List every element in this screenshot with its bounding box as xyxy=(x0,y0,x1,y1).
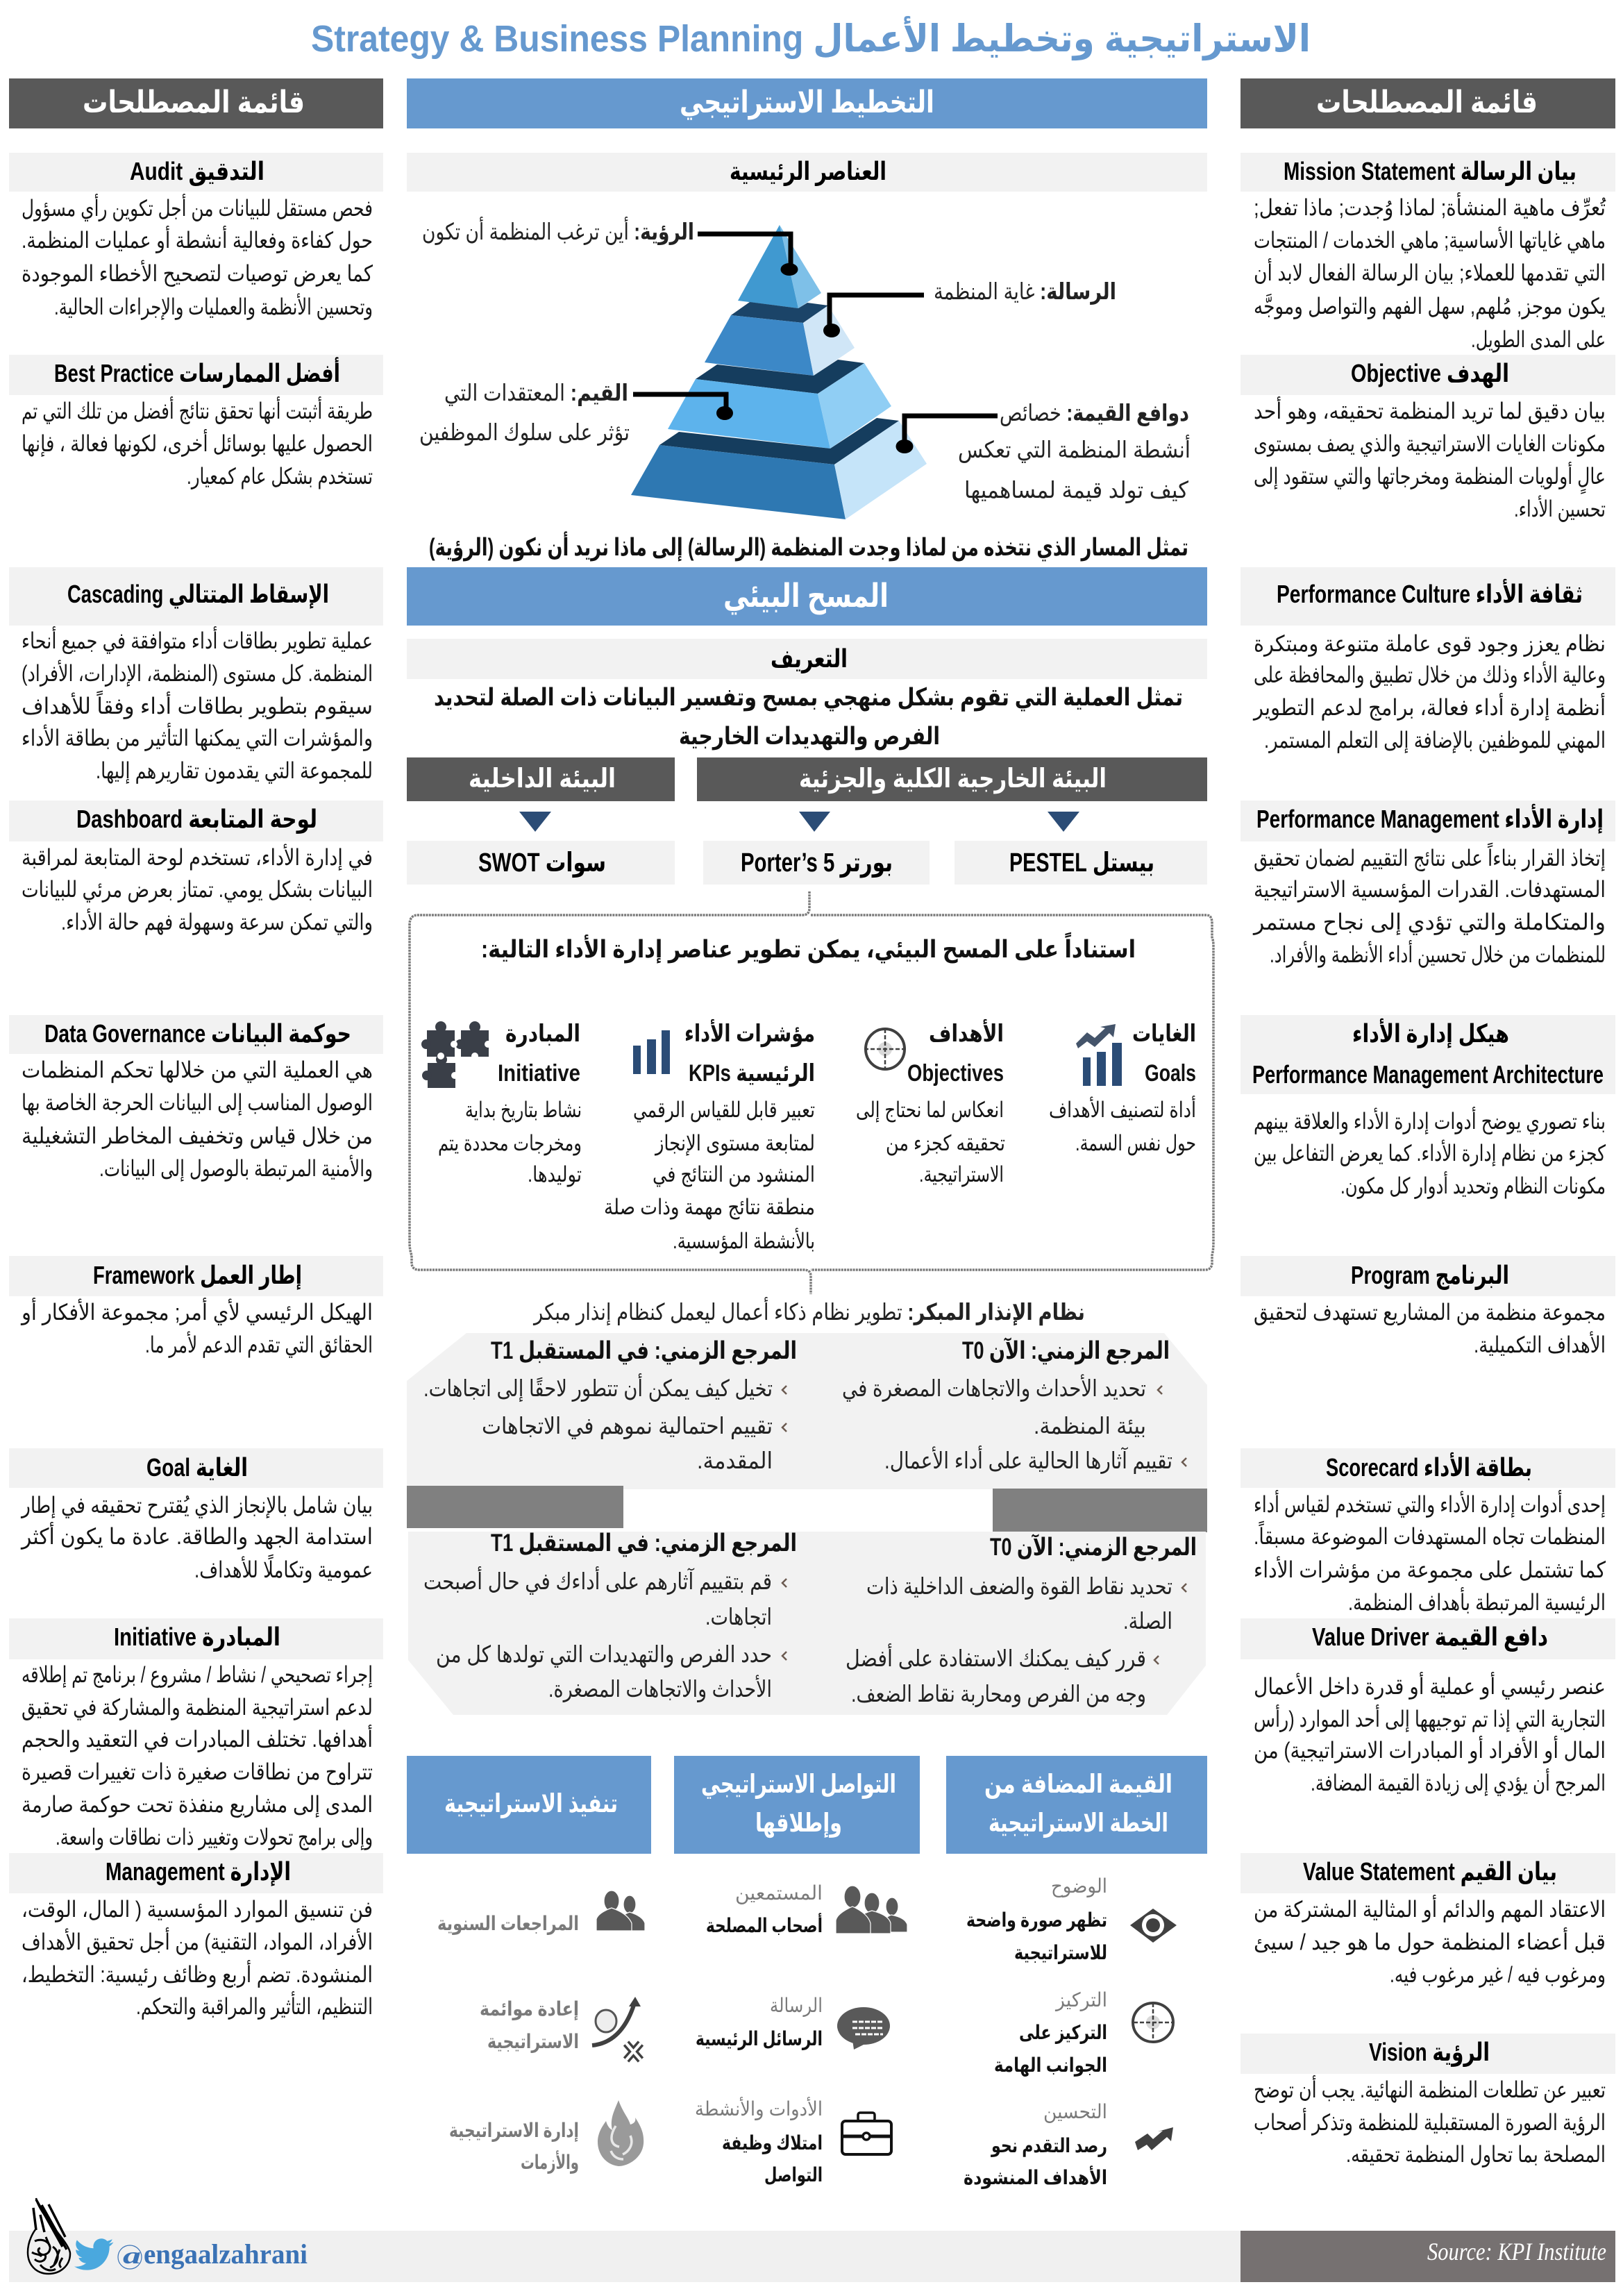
box: SWOT: سوات SWOT xyxy=(478,848,606,878)
item: audience xyxy=(706,1882,907,1936)
item: focus: التركيز على xyxy=(1019,2022,1107,2044)
arrow: to Porter xyxy=(799,812,830,832)
element: Goals: Goals xyxy=(1145,1060,1196,1087)
list: future T1 second items: قم بتقييم آثارهم على أداءك في حال أصبحت xyxy=(423,1566,772,1595)
item: clarity: للاستراتيجية xyxy=(1014,1942,1107,1964)
glossary entry: Audit: فحص مستقل للبيانات من أجل تكوين رأي مسؤول xyxy=(22,194,373,221)
glossary entry: Best Practice xyxy=(9,355,383,489)
list: future T1 second items: الأحداث والاتجاهات المصغرة. xyxy=(548,1675,772,1702)
text: definition xyxy=(434,684,1183,751)
glossary entry: Dashboard: البيانات بشكل يومي. تمتاز بعرض مرئي للبيانات xyxy=(22,877,373,903)
glossary entry: Initiative: إجراء تصحيحي / نشاط / مشروع / برنامج تم إطلاقه xyxy=(22,1662,373,1688)
callout: mission: الرسالة: غاية المنظمة xyxy=(934,278,1116,305)
panel: performance management elements xyxy=(410,891,1213,1294)
glossary entry: Cascading xyxy=(9,567,383,784)
item: strategy and crisis management xyxy=(449,2100,644,2174)
panel: right glossary column xyxy=(1241,78,1615,2168)
glossary entry: Program: البرنامج Program xyxy=(1351,1261,1509,1290)
icon: briefcase xyxy=(842,2113,891,2154)
item: message xyxy=(696,1995,890,2050)
icon: diamond eye xyxy=(1130,1909,1177,1943)
glossary entry: Value Driver: دافع القيمة Value Driver xyxy=(1312,1623,1548,1652)
glossary entry: Dashboard: في إدارة الأداء، تستخدم لوحة المتابعة لمراقبة xyxy=(22,844,373,871)
item: focus: التركيز xyxy=(1054,1989,1107,2011)
glossary entry: Best Practice: تستخدم بشكل عام كمعيار. xyxy=(187,464,373,489)
heading: main elements xyxy=(407,153,1207,192)
box: Porter's 5: بورتر Porter’s 5 xyxy=(741,848,893,878)
element: Initiative: نشاط بتاريخ بداية xyxy=(465,1098,582,1123)
glossary entry: Dashboard: لوحة المتابعة Dashboard xyxy=(76,805,317,834)
heading: elements intro: استناداً على المسح البيئي، يمكن تطوير عناصر إدارة الأداء التالية: xyxy=(481,932,1136,964)
glossary entry: Data Governance xyxy=(9,1015,383,1182)
item: focus: الجوانب الهامة xyxy=(994,2054,1107,2077)
text: pyramid summary: تمثل المسار الذي نتخذه من لماذا وجدت المنظمة (الرسالة) إلى ماذا نريد أن نكون (الرؤية) xyxy=(429,531,1188,562)
item: tools and activities xyxy=(695,2096,891,2186)
heading: external environment: البيئة الخارجية الكلية والجزئية xyxy=(799,764,1107,794)
bar: timeframe divider right xyxy=(993,1489,1207,1532)
glossary entry: Goal: الغاية Goal xyxy=(146,1453,248,1482)
glossary entry: Audit: التدقيق Audit xyxy=(130,157,264,186)
element: KPIs: لمتابعة مستوى الإنجاز xyxy=(654,1131,815,1156)
glossary entry: Management: الأفراد، المواد، التقنية) من أجل تحقيق الأهداف xyxy=(22,1927,373,1955)
heading: strategic planning xyxy=(407,78,1207,128)
glossary entry: Cascading: والمؤشرات التي يمكنها التأثير من بطاقة الأداء xyxy=(22,723,373,751)
heading: main elements: العناصر الرئيسية xyxy=(730,157,886,186)
glossary entry: Performance Culture xyxy=(1241,567,1615,753)
glossary entry: Value Driver xyxy=(1241,1618,1615,1796)
heading: external environment xyxy=(697,757,1207,801)
panel: opportunities and threats timeframes xyxy=(407,1333,1207,1489)
callout: value drivers: دوافع القيمة: خصائص xyxy=(1000,400,1189,427)
list: now T0 second items: تحديد نقاط القوة والضعف الداخلية ذات xyxy=(866,1573,1172,1600)
icon: bars xyxy=(633,1030,670,1074)
glossary entry: Cascading: الإسقاط المتتالي Cascading xyxy=(67,580,329,609)
heading: strategy execution: تنفيذ الاستراتيجية xyxy=(444,1789,618,1818)
glossary entry: Cascading: عملية تطوير بطاقات أداء متوافقة في جميع أنحاء xyxy=(22,626,373,654)
glossary entry: Performance Management: إدارة الأداء Performance Management xyxy=(1256,803,1604,834)
glossary entry: Management: التنظيم، التأثير والمراقبة والتحكم. xyxy=(136,1991,373,2020)
glossary entry: Audit: كما يعرض توصيات لتصحيح الأخطاء الموجودة xyxy=(22,260,373,287)
glossary entry: Mission Statement xyxy=(1241,153,1615,353)
glossary entry: Value Statement xyxy=(1241,1853,1615,1988)
element: KPIs xyxy=(604,1019,815,1254)
glossary entry: Value Statement: قبل أعضاء المنظمة حول ما هو جيد / سيئ xyxy=(1254,1927,1606,1955)
glossary entry: Best Practice: طريقة أثبتت أنها تحقق نتائج أفضل من تلك التي تم xyxy=(22,396,373,424)
item: annual reviews xyxy=(437,1891,645,1935)
item: strategic realignment: الاستراتيجية xyxy=(487,2031,579,2053)
element: KPIs: تعبير قابل للقياس الرقمي xyxy=(633,1098,815,1123)
list: future T1 items: تقييم احتمالية نموهم في الاتجاهات xyxy=(482,1413,773,1439)
glossary entry: Audit xyxy=(9,153,383,320)
heading: glossary right: قائمة المصطلحات xyxy=(1316,85,1538,119)
list: now T0 items xyxy=(842,1374,1186,1474)
glossary entry: Management: المنشودة. تضم أربع وظائف رئيسية: التخطيط، xyxy=(22,1960,373,1988)
item: message: الرسائل الرئيسية xyxy=(696,2028,823,2050)
glossary entry: Management xyxy=(9,1853,383,2020)
icon: target xyxy=(864,1029,906,1069)
glossary entry: Mission Statement: بيان الرسالة Mission Statement xyxy=(1284,157,1576,186)
heading: now T0 second: المرجع الزمني: الآن T0 xyxy=(990,1533,1197,1561)
heading: strategic planning: التخطيط الاستراتيجي xyxy=(680,85,934,120)
callout: value drivers xyxy=(958,400,1191,503)
item: message: الرسالة xyxy=(770,1995,823,2017)
element: Initiative: ومخرجات محددة يتم xyxy=(438,1131,582,1156)
glossary entry: Framework xyxy=(9,1256,383,1358)
callout: vision: الرؤية: أين ترغب المنظمة أن تكون xyxy=(422,217,694,246)
element: Initiative xyxy=(421,1021,582,1187)
item: audience: المستمعين xyxy=(735,1882,823,1904)
glossary entry: Scorecard: بطاقة الأداء Scorecard xyxy=(1326,1452,1532,1482)
glossary entry: Data Governance: من خلال قياس وتخفيف المخاطر التشغيلية xyxy=(22,1123,373,1149)
glossary entry: Data Governance: هي العملية التي من خلالها تحكم المنظمات xyxy=(22,1057,373,1083)
element: Goals xyxy=(1049,1021,1196,1156)
glossary entry: Goal: عمومية وتكاملًا للأهداف. xyxy=(194,1554,373,1583)
footer: source xyxy=(1241,2231,1615,2282)
glossary entry: Best Practice: أفضل الممارسات Best Practice xyxy=(54,357,340,388)
element: KPIs: الرئيسية KPIs xyxy=(689,1060,815,1087)
callout: value drivers: كيف تولد قيمة لمساهميها xyxy=(964,477,1188,503)
icon: three people xyxy=(836,1886,907,1934)
glossary entry: Performance Management Architecture xyxy=(1241,1015,1615,1199)
list: now T0 second items xyxy=(846,1573,1186,1708)
box: Porter's 5 xyxy=(703,841,930,885)
text: twitter handle: a xyxy=(123,2243,141,2269)
title: الاستراتيجية وتخطيط الأعمال Strategy & Business Planning xyxy=(311,16,1311,60)
item: clarity: تظهر صورة واضحة xyxy=(966,1909,1107,1932)
icon: target small xyxy=(1133,2003,1173,2042)
list: now T0 items: تقييم آثارها الحالية على أداء الأعمال. xyxy=(884,1446,1172,1474)
glossary entry: Best Practice: الحصول عليها بوسائل أخرى، لكونها فعالة ، فإنها xyxy=(22,429,373,457)
list: now T0 items: تحديد الأحداث والاتجاهات المصغرة في xyxy=(842,1374,1146,1402)
list: future T1 second items xyxy=(423,1566,787,1702)
icon: chat bubble xyxy=(837,2007,890,2050)
element: KPIs: المنشود من النتائج في xyxy=(653,1162,815,1187)
glossary entry: Scorecard xyxy=(1241,1448,1615,1616)
glossary entry: Data Governance: والأمنية المرتبطة بالوصول إلى البيانات. xyxy=(99,1155,373,1182)
glossary entry: Initiative: تتراوح من نطاقات صغيرة ذات تغييرات قصيرة xyxy=(22,1759,373,1785)
element: Initiative: توليدها. xyxy=(528,1162,582,1187)
list: future T1 items xyxy=(423,1373,787,1473)
list: now T0 second items: الصلة. xyxy=(1123,1608,1172,1634)
glossary entry: Initiative: المبادرة Initiative xyxy=(114,1623,280,1652)
heading: strategic communication xyxy=(674,1756,920,1854)
glossary entry: Vision: الرؤية Vision xyxy=(1369,2038,1490,2067)
box: SWOT xyxy=(407,841,675,885)
glossary entry: Cascading: للمجموعة التي يقدمون تقاريرهم إليها. xyxy=(96,758,373,784)
panel: strengths and weaknesses timeframes xyxy=(408,1530,1206,1715)
element: Objectives xyxy=(856,1019,1005,1187)
glossary entry: Initiative xyxy=(9,1618,383,1850)
arrow: to PESTEL xyxy=(1048,812,1079,832)
icon: puzzle pieces xyxy=(421,1021,491,1088)
item: clarity xyxy=(966,1875,1177,1964)
glossary entry: Management: الإدارة Management xyxy=(106,1857,291,1886)
icon: rising zigzag arrow xyxy=(1135,2127,1173,2150)
footer: author bar xyxy=(9,2231,1241,2282)
element: Objectives: تحقيقه كجزء من xyxy=(886,1131,1005,1156)
list: now T0 second items: قرر كيف يمكنك الاستفادة على أفضل xyxy=(846,1643,1146,1672)
list: now T0 second items: وجه من الفرص ومحاربة نقاط الضعف. xyxy=(851,1681,1146,1708)
item: strategy and crisis management: إدارة الاستراتيجية xyxy=(449,2120,579,2143)
list: now T0 items: بيئة المنظمة. xyxy=(1034,1413,1146,1439)
element: KPIs: مؤشرات الأداء xyxy=(684,1019,815,1048)
heading: internal environment xyxy=(407,757,675,801)
list: future T1 second items: حدد الفرص والتهديدات التي تولدها كل من xyxy=(436,1641,772,1668)
element: Goals: أداة لتصنيف الأهداف xyxy=(1049,1096,1196,1122)
item: strategic realignment xyxy=(480,1997,641,2060)
text: definition: الفرص والتهديدات الخارجية xyxy=(679,723,940,751)
list: future T1 second items: اتجاهات. xyxy=(705,1604,772,1629)
item: tools and activities: امتلاك وظيفة xyxy=(722,2132,823,2154)
element: Objectives: انعكاس لما نحتاج إلى xyxy=(856,1098,1004,1123)
icon: flame xyxy=(598,2100,644,2166)
text: definition: تمثل العملية التي تقوم بشكل منهجي بمسح وتفسير البيانات ذات الصلة لتحديد xyxy=(434,684,1183,712)
glossary entry: Performance Management xyxy=(1241,801,1615,968)
heading: added value of strategic plan: الخطة الاستراتيجية xyxy=(989,1809,1168,1838)
glossary entry: Initiative: لدعم استراتيجية المنظمة والمشاركة في تحقيق xyxy=(22,1695,373,1720)
glossary entry: Cascading: المنظمة. كل مستوى (المنظمة، الإدارات، الأفراد) xyxy=(22,660,373,687)
item: strategic realignment: إعادة موائمة xyxy=(480,1998,579,2021)
heading: glossary left: قائمة المصطلحات xyxy=(83,85,305,119)
glossary entry: Dashboard xyxy=(9,801,383,935)
element: Goals: حول نفس السمة. xyxy=(1075,1131,1196,1156)
element: Objectives: Objectives xyxy=(907,1060,1004,1087)
logo: calligraphy teardrop xyxy=(28,2198,70,2274)
callout: values: تؤثر على سلوك الموظفين xyxy=(419,419,630,446)
icon: bars with rising arrow xyxy=(1076,1024,1122,1086)
heading: environmental scan: المسح البيئي xyxy=(723,577,889,615)
element: Initiative: Initiative xyxy=(498,1060,580,1087)
item: improvement: التحسين xyxy=(1043,2101,1107,2123)
heading: glossary right xyxy=(1241,78,1615,128)
glossary entry: Framework: الحقائق التي تقدم الدعم لأمر ما. xyxy=(145,1331,373,1358)
glossary entry: Performance Management Architecture: هيكل إدارة الأداء xyxy=(1352,1018,1509,1048)
heading: internal environment: البيئة الداخلية xyxy=(469,764,616,794)
heading: now T0: المرجع الزمني: الآن T0 xyxy=(962,1336,1170,1365)
heading: strategic communication: وإطلاقها xyxy=(755,1809,842,1838)
heading: added value of strategic plan: القيمة المضافة من xyxy=(984,1770,1172,1799)
glossary entry: Goal xyxy=(9,1448,383,1583)
item: clarity: الوضوح xyxy=(1051,1875,1107,1897)
box: PESTEL: بيستل PESTEL xyxy=(1009,848,1154,878)
glossary entry: Initiative: أهدافها. تختلف المبادرات في التعقيد والحجم xyxy=(22,1725,373,1752)
heading: environmental scan xyxy=(407,567,1207,626)
glossary entry: Objective: الهدف Objective xyxy=(1351,359,1509,388)
glossary entry: Initiative: المدى إلى مشاريع منفذة تحت حوكمة صارمة xyxy=(22,1792,373,1818)
element: KPIs: بالأنشطة المؤسسية. xyxy=(673,1227,815,1254)
heading: future T1 second: المرجع الزمني: في المستقبل T1 xyxy=(491,1530,797,1557)
element: KPIs: منطقة نتائج مهمة وذات صلة xyxy=(604,1195,815,1220)
glossary entry: Program xyxy=(1241,1256,1615,1357)
item: improvement: الأهداف المنشودة xyxy=(964,2165,1107,2189)
box: PESTEL xyxy=(955,841,1207,885)
item: tools and activities: الأدوات والأنشطة xyxy=(695,2096,823,2120)
glossary entry: Initiative: وإلى برامج تحولات وتغيير ذات نطاقات واسعة. xyxy=(56,1825,373,1850)
heading: future T1: المرجع الزمني: في المستقبل T1 xyxy=(491,1337,797,1365)
arrow: to SWOT xyxy=(519,812,551,832)
glossary entry: Data Governance: حوكمة البيانات Data Governance xyxy=(44,1019,351,1048)
item: improvement: رصد التقدم نحو xyxy=(990,2135,1107,2157)
icon: twitter bird xyxy=(74,2238,113,2270)
heading: added value of strategic plan xyxy=(946,1756,1207,1854)
glossary entry: Performance Management: والمتكاملة والتي تؤدي إلى نجاح مستمر xyxy=(1252,910,1606,935)
callout: values xyxy=(419,380,630,446)
glossary entry: Management: فن تنسيق الموارد المؤسسية ( المال، الوقت، xyxy=(22,1897,373,1922)
item: audience: أصحاب المصلحة xyxy=(706,1913,823,1936)
glossary entry: Goal: استدامة الجهد والطاقة. عادة ما يكون أكثر xyxy=(20,1522,373,1550)
glossary entry: Data Governance: الوصول المناسب إلى البيانات الحرجة الخاصة بها xyxy=(22,1090,373,1116)
heading: strategic communication: التواصل الاستراتيجي xyxy=(701,1770,896,1799)
element: Initiative: المبادرة xyxy=(505,1021,580,1047)
item: tools and activities: التواصل xyxy=(764,2164,823,2186)
item: strategy and crisis management: والأزمات xyxy=(521,2150,579,2174)
panel: left glossary column xyxy=(9,78,383,2020)
icon: two people xyxy=(596,1891,645,1931)
element: Objectives: الأهداف xyxy=(929,1019,1004,1047)
item: improvement xyxy=(964,2101,1173,2189)
callout: value drivers: أنشطة المنظمة التي تعكس xyxy=(958,435,1191,463)
glossary entry: Framework: الهيكل الرئيسي لأي أمر; مجموعة الأفكار أو xyxy=(20,1298,373,1325)
callout: values: القيم: المعتقدات التي xyxy=(444,380,628,406)
glossary entry: Audit: حول كفاءة وفعالية أنشطة أو عمليات المنظمة. xyxy=(22,226,373,253)
heading: strategy execution xyxy=(407,1756,651,1854)
text: early warning system: نظام الإنذار المبكر: تطوير نظام ذكاء أعمال ليعمل كنظام إنذار مبكر xyxy=(532,1297,1085,1326)
item: focus xyxy=(994,1989,1173,2077)
text: twitter handle: engaalzahrani xyxy=(144,2238,308,2270)
element: Goals: الغايات xyxy=(1132,1021,1196,1047)
glossary entry: Objective xyxy=(1241,355,1615,522)
element: Objectives: الاستراتيجية. xyxy=(919,1162,1004,1187)
icon: play diagram arrow xyxy=(592,1997,641,2060)
glossary entry: Vision xyxy=(1241,2034,1615,2168)
glossary entry: Dashboard: والتي تمكن سرعة وسهولة فهم حالة الأداء. xyxy=(61,908,373,935)
list: future T1 items: تخيل كيف يمكن أن تتطور لاحقًا إلى اتجاهات. xyxy=(423,1373,773,1402)
glossary entry: Performance Culture: ثقافة الأداء Performance Culture xyxy=(1277,578,1583,608)
glossary entry: Goal: بيان شامل بالإنجاز الذي يُقترح تحقيقه في إطار xyxy=(20,1493,373,1518)
list: future T1 items: المقدمة. xyxy=(697,1448,773,1473)
heading: definition xyxy=(407,639,1207,679)
heading: definition: التعريف xyxy=(771,644,848,673)
glossary entry: Audit: وتحسين الأنظمة والعمليات والإجراءات الحالية. xyxy=(54,293,373,320)
bar: timeframe divider left xyxy=(407,1486,623,1528)
pyramid diagram xyxy=(631,225,998,519)
glossary entry: Value Statement: بيان القيم Value Statement xyxy=(1303,1857,1557,1886)
heading: glossary left xyxy=(9,78,383,128)
item: annual reviews: المراجعات السنوية xyxy=(437,1913,579,1935)
glossary entry: Framework: إطار العمل Framework xyxy=(93,1261,302,1290)
glossary entry: Cascading: سيقوم بتطوير بطاقات أداء وفقاً للأهداف xyxy=(22,690,373,719)
